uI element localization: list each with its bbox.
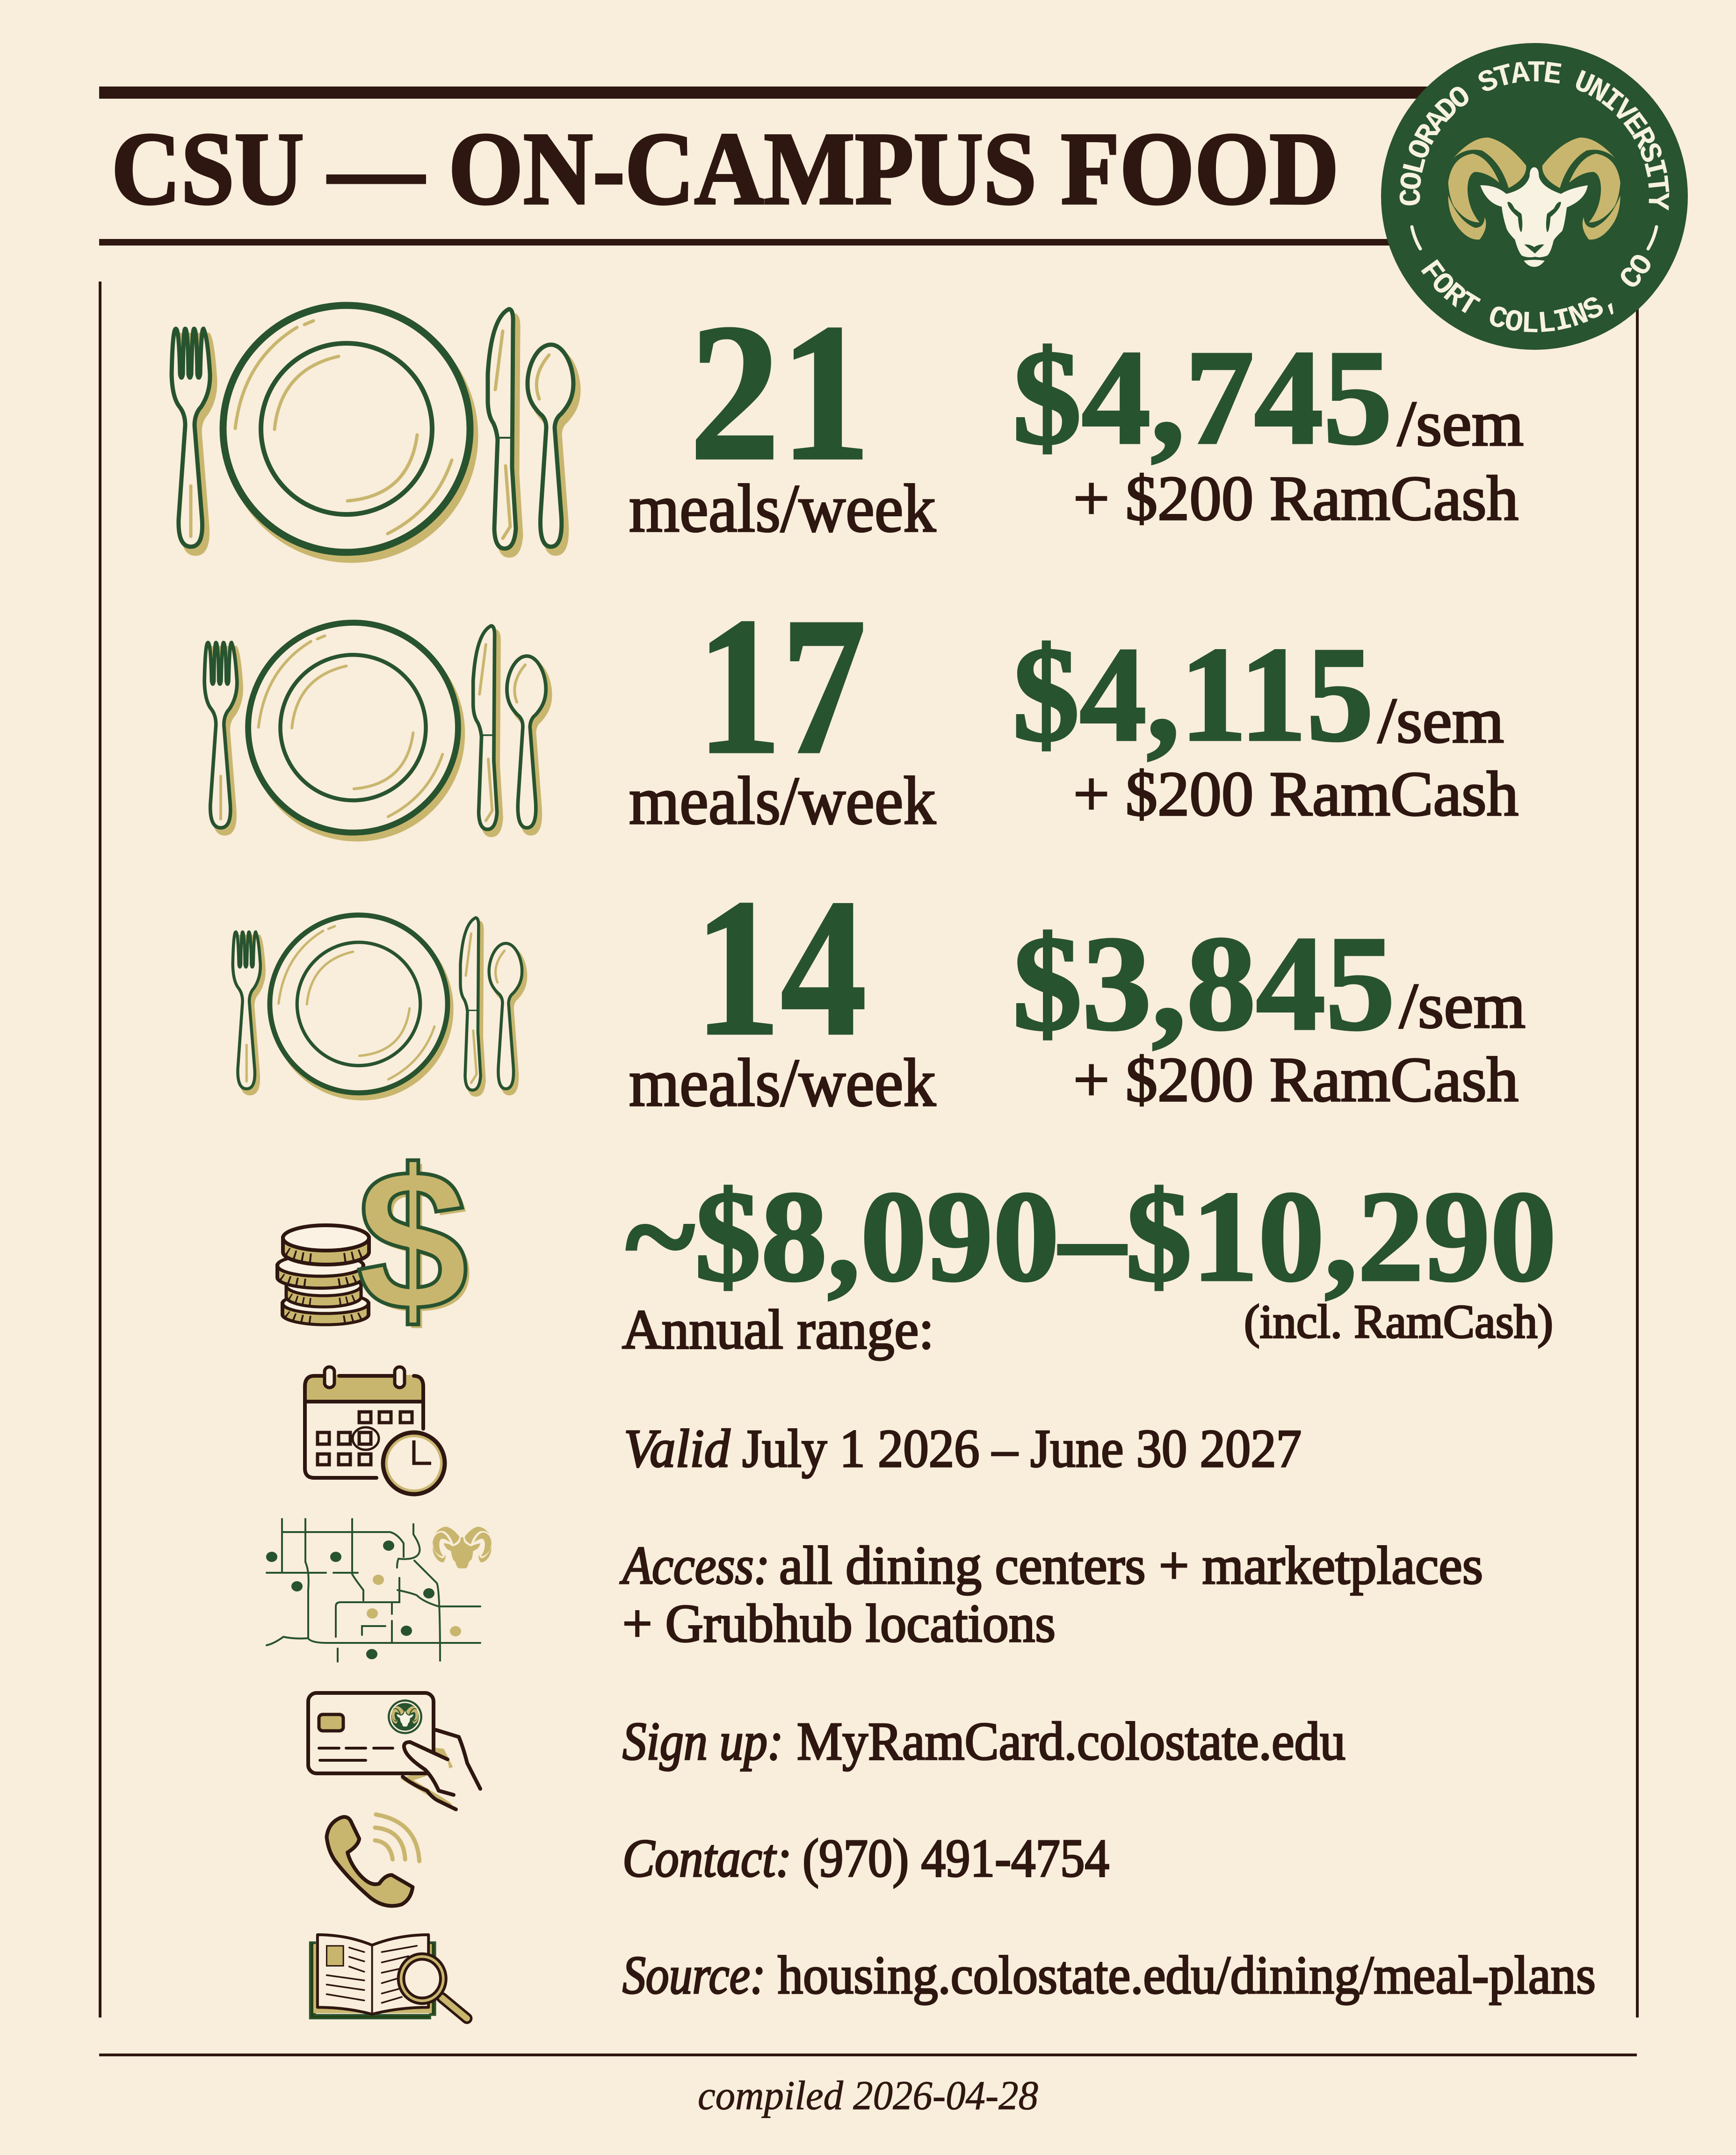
row: 17 meals per week	[204, 577, 1519, 839]
access line one: Access:	[620, 1536, 770, 1596]
header rules	[99, 87, 1455, 246]
sign up: MyRamCard.colostate.edu	[797, 1712, 1345, 1772]
icon: telephone	[326, 1815, 420, 1906]
contact	[622, 1829, 1109, 1888]
icon: place setting large	[172, 305, 578, 559]
icon: coins and dollar sign: $	[356, 1128, 469, 1352]
including RamCash note: (incl. RamCash)	[1244, 1295, 1553, 1348]
sign up: Sign up:	[622, 1712, 783, 1772]
badge: Colorado State University: FORT COLLINS, CO	[1412, 249, 1661, 342]
number 17: 17	[697, 577, 866, 795]
per semester: /sem	[1378, 685, 1504, 756]
access line one: all dining centers + marketplaces	[779, 1536, 1483, 1596]
badge: Colorado State University: COLORADO STATE UNIVERSITY	[1395, 56, 1675, 211]
per semester: /sem	[1399, 970, 1526, 1041]
number 14: 14	[694, 859, 867, 1076]
icon: meal card in hand	[308, 1693, 480, 1809]
label meals per week: meals/week	[629, 763, 936, 839]
label meals per week: meals/week	[629, 1045, 936, 1121]
contact: Contact:	[622, 1829, 792, 1888]
annual range amount: ~$8,090–$10,290	[626, 1164, 1556, 1309]
icon: coins and dollar sign	[277, 1128, 472, 1356]
content frame	[99, 282, 1637, 2055]
icon: calendar and clock	[304, 1367, 445, 1494]
price 3845: $3,845	[1013, 908, 1395, 1058]
RamCash note: + $200 RamCash	[1073, 1045, 1519, 1115]
icon: book and magnifier	[310, 1935, 467, 2018]
icon: place setting small	[233, 915, 525, 1098]
access line two: + Grubhub locations	[622, 1594, 1056, 1654]
badge: Colorado State University	[1381, 43, 1688, 350]
source: Source:	[622, 1945, 766, 2005]
price 4115: $4,115	[1013, 619, 1374, 769]
number 21: 21	[689, 283, 871, 501]
icon: place setting medium	[204, 622, 550, 839]
row: 14 meals per week	[233, 859, 1526, 1121]
label meals per week: meals/week	[629, 470, 936, 546]
contact: (970) 491-4754	[803, 1829, 1109, 1888]
price 4745: $4,745	[1013, 322, 1392, 472]
icon: campus map	[266, 1519, 492, 1662]
RamCash note: + $200 RamCash	[1073, 759, 1519, 829]
valid dates: Valid	[624, 1419, 731, 1479]
row: 21 meals per week	[172, 283, 1524, 559]
title: CSU — ON-CAMPUS FOOD	[111, 111, 1339, 226]
annual range label: Annual range:	[622, 1298, 934, 1360]
footer compiled date: compiled 2026-04-28	[698, 2073, 1038, 2119]
valid dates: July 1 2026 – June 30 2027	[742, 1419, 1302, 1479]
icon: coins and dollar sign: $	[360, 1132, 472, 1356]
RamCash note: + $200 RamCash	[1073, 463, 1519, 534]
source: housing.colostate.edu/dining/meal-plans	[778, 1945, 1596, 2005]
per semester: /sem	[1397, 388, 1524, 459]
